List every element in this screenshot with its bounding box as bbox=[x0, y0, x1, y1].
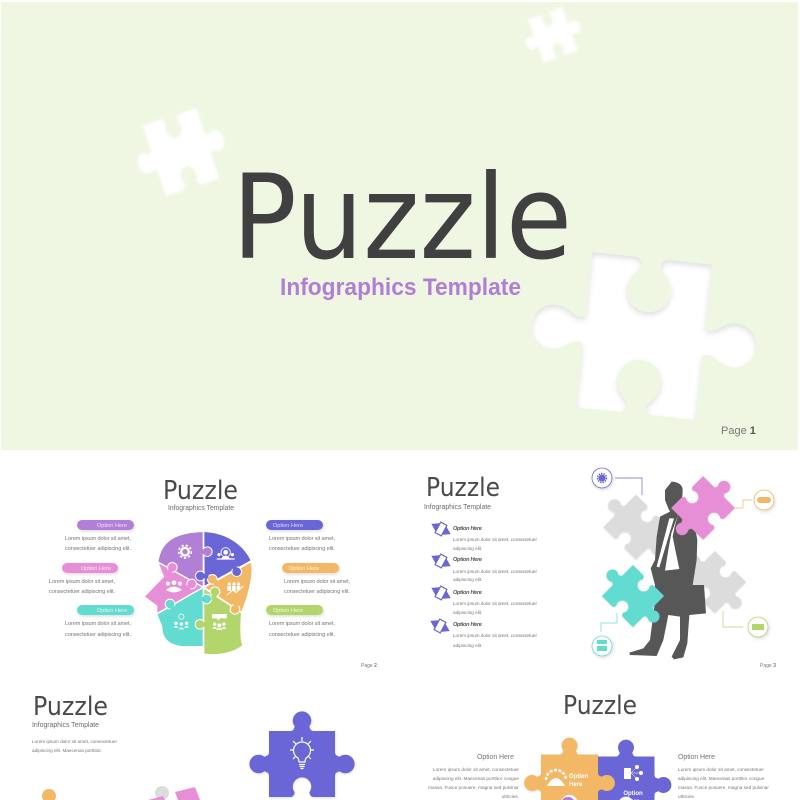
option text 4 bbox=[269, 536, 335, 552]
right option text: Lorem ipsum dolor sit amet, consectetuer bbox=[678, 767, 764, 772]
grey puzzle piece upper bbox=[594, 485, 678, 569]
orange puzzle piece bbox=[524, 738, 615, 800]
list item 4 bbox=[427, 616, 537, 648]
left option text bbox=[428, 754, 519, 799]
option pill 4 bbox=[266, 520, 323, 530]
arrow: growth to grey piece bbox=[723, 611, 743, 627]
puzzle cutout: large bbox=[524, 247, 764, 425]
description text bbox=[32, 739, 117, 753]
left option text: ultricies. bbox=[502, 794, 519, 799]
left option text: Option Here bbox=[477, 754, 514, 761]
icon circle: growth bbox=[748, 617, 768, 637]
option text 5: Lorem ipsum dolor sit amet, bbox=[284, 579, 350, 585]
list item 2: Option Here bbox=[453, 557, 482, 563]
blue piece label bbox=[623, 791, 643, 800]
right option text bbox=[678, 754, 769, 799]
subheading: Infographics Template bbox=[424, 502, 491, 511]
panel: slide 2 head puzzle bbox=[49, 476, 377, 669]
icon: lightbulb bbox=[290, 737, 314, 768]
pink piece fragments bbox=[148, 787, 200, 800]
description text: adipiscing elit. Maecenas porttitor. bbox=[32, 748, 102, 753]
right option text: adipiscing elit. Maecenas porttitor congue bbox=[678, 776, 765, 781]
blue piece label: Option bbox=[623, 791, 643, 797]
icon: growth team bbox=[227, 582, 243, 595]
list item 4: Option Here bbox=[453, 622, 482, 628]
puzzle cutout: left bbox=[127, 103, 235, 201]
option text 3 bbox=[65, 621, 131, 638]
left option text: adipiscing elit. Maecenas porttitor congue bbox=[433, 776, 519, 781]
option pill 2: Option Here bbox=[81, 566, 111, 572]
option pill 5 bbox=[282, 563, 339, 573]
description text: Lorem ipsum dolor sit amet, consectetuer bbox=[32, 739, 117, 744]
panel: slide 5 two pieces bbox=[428, 691, 769, 800]
option text 2 bbox=[49, 579, 115, 595]
title: Puzzle bbox=[232, 149, 572, 286]
orange piece label: Option bbox=[569, 774, 589, 780]
option text 4: consectetuer adipiscing elit. bbox=[269, 546, 335, 552]
grey piece fragment bbox=[155, 786, 169, 800]
option text 2: consectetuer adipiscing elit. bbox=[49, 589, 115, 595]
list item 3: Lorem ipsum dolor sit amet, consectetuer bbox=[453, 601, 537, 606]
right option text: ultricies. bbox=[678, 794, 695, 799]
icon circle: gear bbox=[592, 468, 612, 488]
left option text: Lorem ipsum dolor sit amet, consectetuer bbox=[433, 767, 519, 772]
teal puzzle piece bbox=[593, 556, 673, 636]
option pill 4: Option Here bbox=[273, 523, 303, 529]
arrow: presenter to teal piece bbox=[601, 613, 617, 632]
subtitle: Infographics Template bbox=[280, 274, 521, 301]
page number: Page 2 bbox=[361, 663, 377, 669]
list item 1: Option Here bbox=[453, 526, 482, 532]
arrow: team to pink piece bbox=[735, 500, 752, 508]
subheading: Infographics Template bbox=[32, 720, 99, 729]
list item 3: Option Here bbox=[453, 590, 482, 596]
heading: Puzzle bbox=[33, 692, 108, 722]
page number: Page 1 bbox=[721, 425, 756, 437]
option text 1 bbox=[65, 536, 131, 552]
list item 2: Lorem ipsum dolor sit amet, consectetuer bbox=[453, 569, 537, 574]
icon circle: presenter bbox=[592, 636, 612, 656]
icon circle: team bbox=[754, 490, 774, 510]
list item 2 bbox=[428, 551, 537, 582]
panel: slide 3 businessman bbox=[424, 467, 776, 669]
panel: slide 4 single piece bbox=[32, 692, 355, 800]
option pill 2 bbox=[62, 563, 118, 573]
icon: location team bbox=[174, 614, 189, 629]
option pill 5: Option Here bbox=[289, 566, 319, 572]
grey puzzle piece lower bbox=[675, 542, 755, 622]
right option text: Option Here bbox=[678, 754, 715, 761]
option pill 1 bbox=[77, 520, 134, 530]
right option text: massa. Fusce posuere, magna sed pulvinar bbox=[678, 785, 769, 790]
option text 2: Lorem ipsum dolor sit amet, bbox=[49, 579, 115, 585]
option pill 3: Option Here bbox=[97, 608, 127, 614]
orange piece label bbox=[569, 774, 589, 788]
blue puzzle piece bbox=[581, 740, 671, 800]
subheading: Infographics Template bbox=[168, 503, 234, 512]
option text 3: Lorem ipsum dolor sit amet, bbox=[65, 621, 131, 627]
list item 3: adipiscing elit. bbox=[453, 610, 482, 615]
heading: Puzzle bbox=[563, 691, 637, 721]
option pill 1: Option Here bbox=[97, 523, 127, 529]
option pill 6 bbox=[266, 605, 323, 615]
pink puzzle piece bbox=[662, 467, 744, 549]
option text 1: Lorem ipsum dolor sit amet, bbox=[65, 536, 131, 542]
option pill 3 bbox=[77, 605, 134, 615]
head puzzle chart bbox=[144, 531, 252, 655]
left option text: massa. Fusce posuere, magna sed pulvinar bbox=[428, 785, 519, 790]
icon: building network bbox=[624, 765, 643, 781]
icon: presenter team bbox=[212, 614, 227, 630]
option text 4: Lorem ipsum dolor sit amet, bbox=[269, 536, 335, 542]
purple knob bbox=[560, 796, 576, 800]
list item 1: adipiscing elit. bbox=[453, 546, 482, 551]
list item 1 bbox=[428, 519, 537, 551]
option text 1: consectetuer adipiscing elit. bbox=[65, 546, 131, 552]
puzzle cutout: top right bbox=[518, 4, 588, 66]
purple puzzle piece bbox=[249, 711, 355, 797]
option text 6: consectetuer adipiscing elit. bbox=[269, 632, 335, 638]
option pill 6: Option Here bbox=[273, 608, 303, 614]
businessman silhouette bbox=[629, 482, 706, 659]
option text 5: consectetuer adipiscing elit. bbox=[284, 589, 350, 595]
list item 1: Lorem ipsum dolor sit amet, consectetuer bbox=[453, 537, 537, 542]
heading: Puzzle bbox=[163, 476, 238, 506]
icon: meeting group bbox=[166, 580, 182, 592]
option text 3: consectetuer adipiscing elit. bbox=[65, 632, 131, 638]
icon: team focus bbox=[217, 548, 235, 560]
option text 6 bbox=[269, 621, 335, 638]
option text 5 bbox=[284, 579, 350, 595]
option text 6: Lorem ipsum dolor sit amet, bbox=[269, 621, 335, 627]
list item 3 bbox=[428, 583, 537, 615]
icon: gear bbox=[179, 545, 191, 558]
heading: Puzzle bbox=[426, 473, 500, 503]
list item 2: adipiscing elit. bbox=[453, 577, 482, 582]
arrow: gear to piece bbox=[615, 478, 642, 495]
page number: Page 3 bbox=[760, 663, 776, 669]
orange piece fragment bbox=[42, 789, 56, 800]
list item 4: Lorem ipsum dolor sit amet, consectetuer bbox=[453, 633, 537, 638]
panel: cover slide bbox=[1, 2, 798, 450]
list item 4: adipiscing elit. bbox=[453, 643, 482, 648]
icon: meeting bbox=[546, 770, 566, 786]
orange piece label: Here bbox=[569, 782, 583, 788]
